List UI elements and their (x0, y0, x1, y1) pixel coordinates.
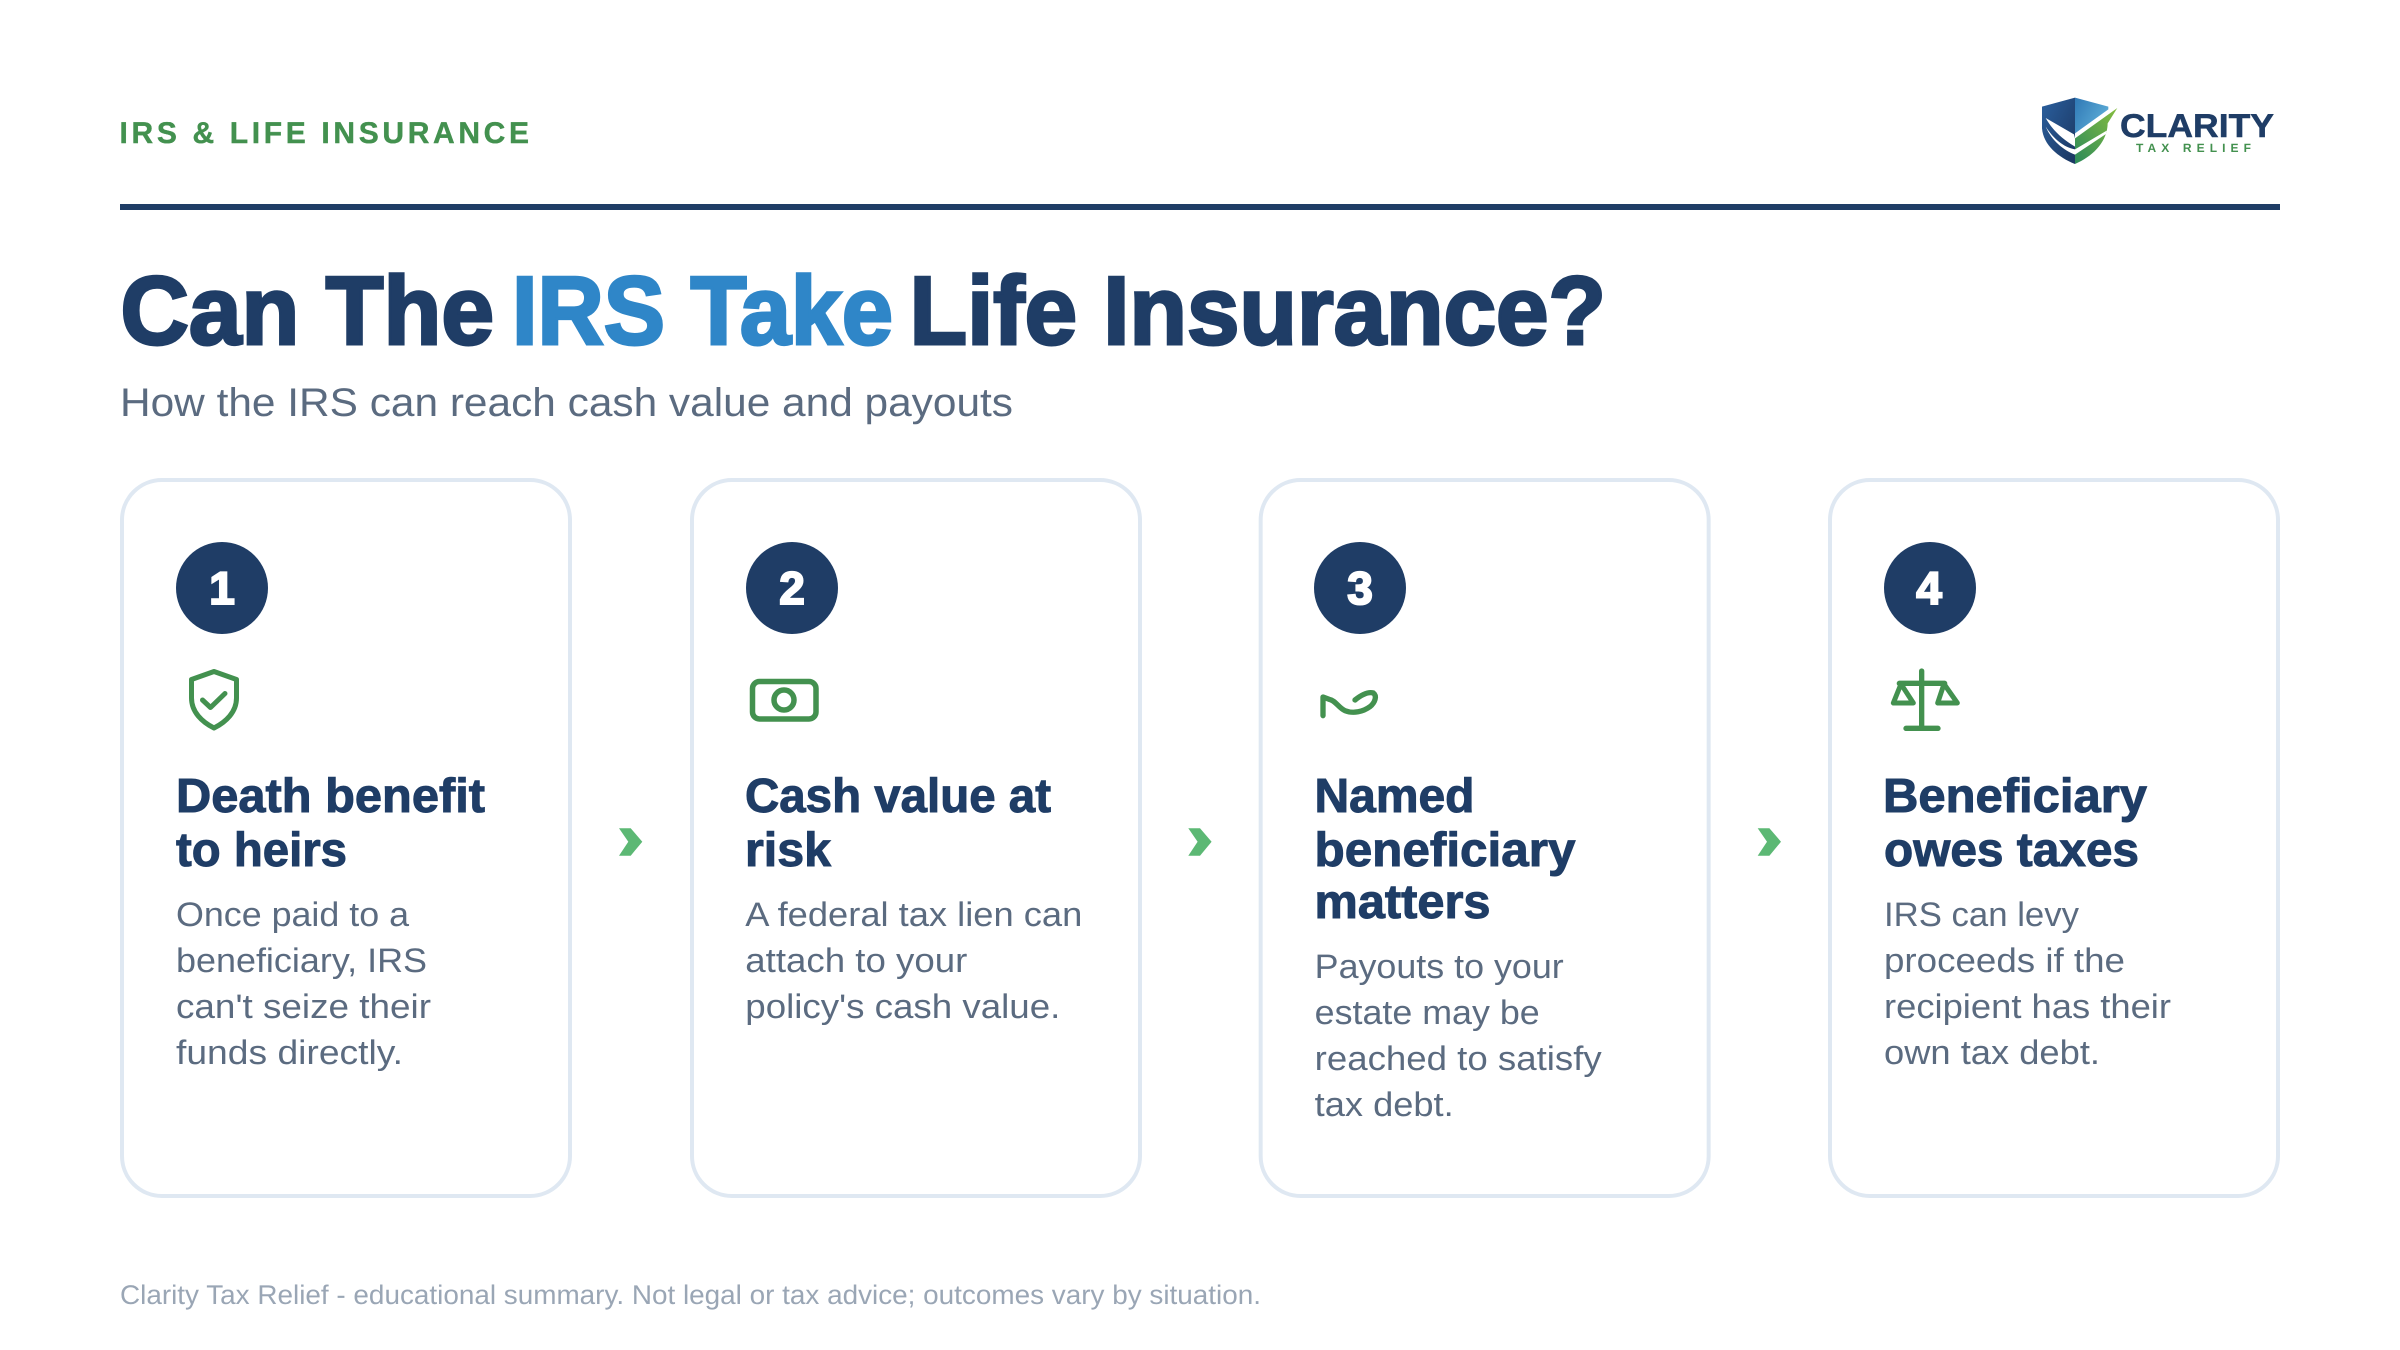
panel: step 4 (1830, 480, 2278, 1196)
step number 3 (1314, 542, 1406, 634)
subtitle: How the IRS can reach cash value and payouts (120, 381, 1013, 425)
logo: Clarity Tax Relief: CLARITY (2120, 107, 2274, 144)
arrow 1 (619, 828, 642, 856)
panel: step 2 (692, 480, 1140, 1196)
title: IRS Take (512, 256, 893, 365)
icon: scales (1893, 671, 1957, 728)
logo: Clarity Tax Relief: TAX RELIEF (2136, 141, 2251, 155)
arrow 2 (1188, 828, 1212, 856)
body text: tax debt. (1315, 1086, 1454, 1124)
panel: step 3 (1261, 480, 1709, 1196)
heading: named beneficiary matters: matters (1314, 876, 1490, 929)
body text: IRS can levy (1884, 896, 2079, 934)
arrow 3 (1758, 828, 1781, 856)
heading: named beneficiary matters: Named (1314, 770, 1474, 823)
heading: death benefit to heirs: Death benefit (176, 770, 485, 823)
body text: attach to your (745, 942, 967, 980)
body text: reached to satisfy (1315, 1040, 1602, 1078)
body text: policy's cash value. (745, 988, 1060, 1026)
body text: funds directly. (176, 1034, 403, 1072)
icon: shield with check (192, 672, 236, 728)
body text: proceeds if the (1884, 942, 2125, 980)
heading: beneficiary owes taxes: Beneficiary (1883, 770, 2147, 823)
body text: Once paid to a (176, 896, 409, 934)
body text (1315, 948, 1602, 1124)
heading: beneficiary owes taxes: owes taxes (1884, 824, 2139, 877)
body text: A federal tax lien can (745, 896, 1082, 934)
step number 4: 4 (1916, 562, 1942, 614)
title: Life Insurance? (910, 256, 1606, 365)
body text: beneficiary, IRS (176, 942, 427, 980)
body text: estate may be (1315, 994, 1540, 1032)
heading: named beneficiary matters: beneficiary (1314, 824, 1576, 877)
body text (176, 896, 431, 1072)
header rule (120, 204, 2280, 210)
heading: beneficiary owes taxes (1883, 770, 2147, 877)
title: Can The (120, 256, 494, 365)
step number 4 (1884, 542, 1976, 634)
heading: named beneficiary matters (1314, 770, 1576, 929)
title (120, 256, 1606, 365)
body text: own tax debt. (1884, 1034, 2100, 1072)
body text: recipient has their (1884, 988, 2171, 1026)
body text (745, 896, 1082, 1026)
icon: banknote (752, 682, 816, 719)
icon: hand (1323, 693, 1375, 716)
body text (1884, 896, 2171, 1072)
step number 2: 2 (779, 562, 805, 614)
logo: Clarity Tax Relief (2042, 98, 2274, 164)
step number 2 (746, 542, 838, 634)
heading: cash value at risk: risk (745, 824, 831, 877)
body text: can't seize their (176, 988, 431, 1026)
footer disclaimer: Clarity Tax Relief - educational summary. Not legal or tax advice; outcomes vary by situation. (120, 1280, 1261, 1310)
body text: Payouts to your (1315, 948, 1564, 986)
step number 1 (176, 542, 268, 634)
panel: step 1 (122, 480, 570, 1196)
step number 1: 1 (209, 562, 235, 614)
heading: death benefit to heirs: to heirs (176, 824, 347, 877)
eyebrow label: IRS & LIFE INSURANCE (120, 117, 529, 150)
step number 3: 3 (1347, 562, 1373, 614)
heading: cash value at risk: Cash value at (745, 770, 1051, 823)
heading: death benefit to heirs (176, 770, 485, 877)
heading: cash value at risk (745, 770, 1051, 877)
